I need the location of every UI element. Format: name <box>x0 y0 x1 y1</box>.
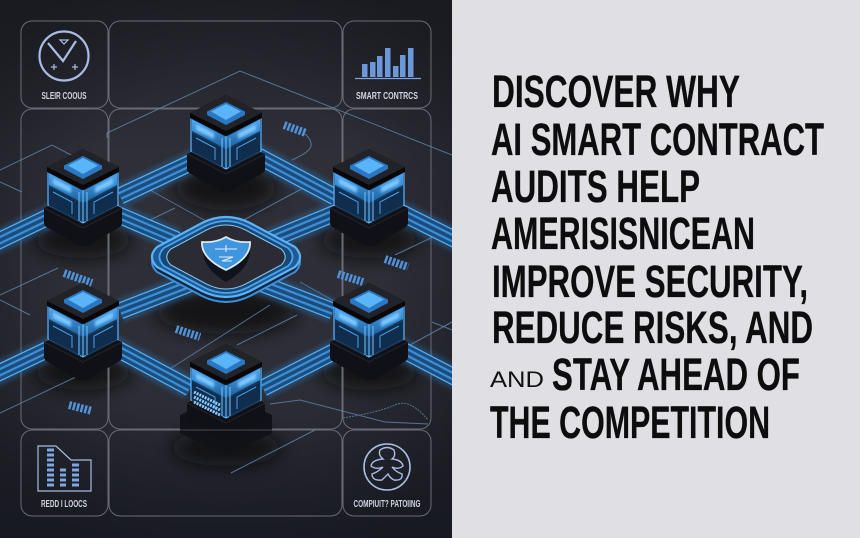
node cube: lower right <box>330 283 408 368</box>
icon: bar chart <box>355 48 421 78</box>
thin circuit lines <box>0 71 452 473</box>
node cube: bottom <box>180 344 272 440</box>
left dark network panel <box>0 0 462 538</box>
icon: document bars <box>38 446 91 491</box>
node cube: top <box>186 95 266 179</box>
label: top left: SLEIR COOUS <box>42 91 87 102</box>
central shield platform <box>152 217 300 302</box>
icon: clock badge <box>40 32 88 80</box>
striped data chips <box>64 125 408 411</box>
headline: DISCOVER WHY <box>492 66 740 117</box>
node cube: lower left <box>44 283 122 380</box>
icon: circular pattern <box>364 444 410 490</box>
icon: shield <box>202 237 250 282</box>
soft shadows beneath nodes <box>35 166 417 466</box>
node cube: right <box>330 149 408 234</box>
grid of rounded panels <box>21 21 431 516</box>
label: bottom left: REDD I LOOCS <box>41 499 87 510</box>
right panel background <box>452 0 860 538</box>
node cube: left <box>44 149 122 234</box>
grid line over bottom node <box>180 430 272 431</box>
label: top right: SMART CONTRCS <box>356 91 418 102</box>
glowing connector pipes <box>0 150 462 388</box>
label: bottom right: COMPIUIT? PATOIING <box>354 499 421 510</box>
headline: AND <box>490 367 544 392</box>
headline <box>490 66 824 448</box>
headline: AUDITS HELP <box>491 161 700 212</box>
